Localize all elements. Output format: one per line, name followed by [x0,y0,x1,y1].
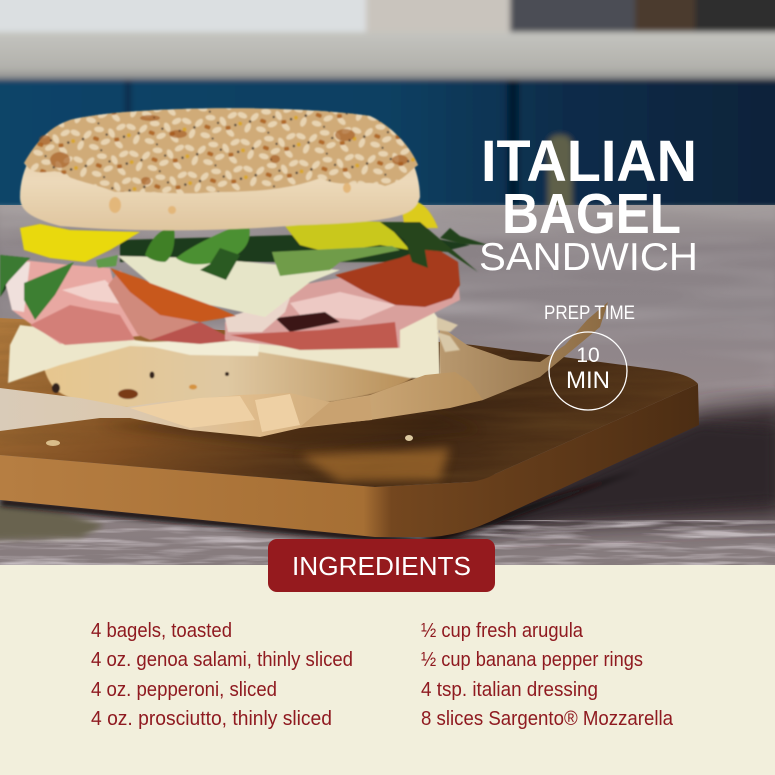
bottom bagel scorch marks [52,372,229,399]
sandwich illustration [0,108,488,408]
title: SANDWICH [479,236,698,279]
ingredients list: right column: ½ cup fresh arugula [421,620,584,642]
parchment paper: front fold [0,372,483,437]
top mozzarella slice [118,256,340,317]
ingredients list: right column: 4 tsp. italian dressing [421,679,598,701]
ingredients list: left column: 4 oz. prosciutto, thinly sliced [91,708,332,730]
ingredients panel background [0,565,775,775]
parchment paper: back wing [440,302,608,409]
ingredients list: left column [91,620,353,730]
ingredients heading badge: INGREDIENTS [292,551,471,581]
photo background: kitchen and weathered table [0,0,775,565]
ingredients list: right column: ½ cup banana pepper rings [421,649,643,671]
top bagel [20,108,420,230]
title: BAGEL [502,182,681,246]
ingredients list: right column [421,620,674,730]
prep time badge [549,332,627,410]
lower mozzarella slice [8,300,440,383]
title [479,129,698,279]
bottom bagel [42,345,412,408]
prep time label: PREP TIME [544,303,635,324]
wooden cutting board [0,318,700,537]
ingredients list: left column: 4 oz. pepperoni, sliced [91,679,277,701]
meat folds: salami and prosciutto [6,260,460,350]
crust blemishes [109,183,351,214]
prep time badge: MIN [566,367,610,394]
seed topping [24,108,418,193]
ingredients list: left column: 4 bagels, toasted [91,620,232,642]
pepperoni slices [110,268,236,322]
banana pepper rings [20,199,438,262]
title: ITALIAN [481,129,697,194]
ingredients heading badge [268,539,495,592]
toasted patches on seeds [39,115,408,185]
board top face [0,318,698,487]
back greens behind fillings [0,232,470,297]
board side face [0,384,699,537]
arugula leaves [0,220,488,320]
ingredients list: right column: 8 slices Sargento® Mozzarella [421,708,674,730]
prep time badge: 10 [576,344,600,367]
cheese fringe at right [437,317,460,352]
ingredients list: left column: 4 oz. genoa salami, thinly sliced [91,649,353,671]
